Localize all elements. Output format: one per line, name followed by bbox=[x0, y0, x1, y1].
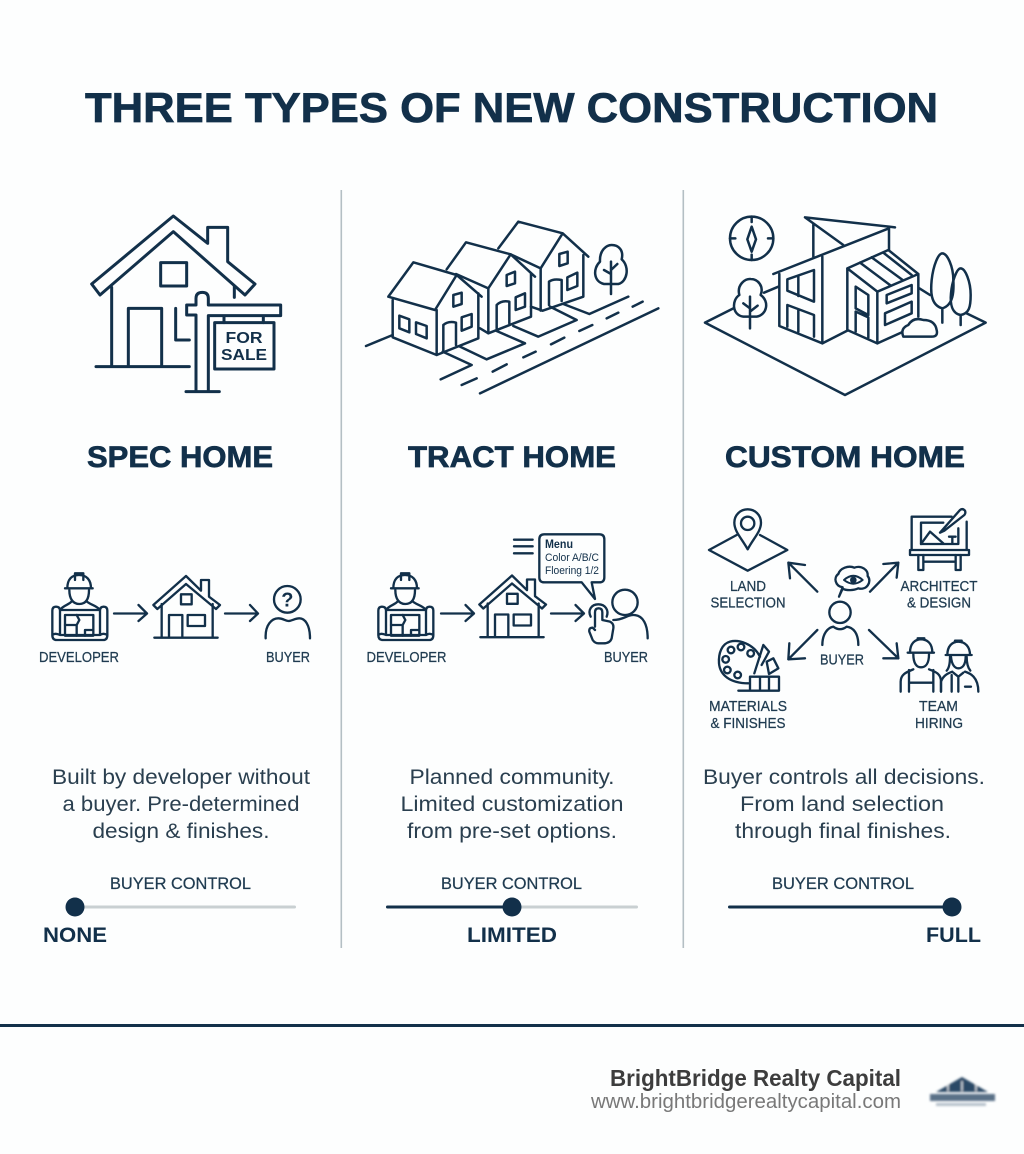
label: buyer: BUYER bbox=[604, 650, 648, 666]
description: through final finishes. bbox=[735, 819, 951, 843]
label: materials and finishes bbox=[709, 699, 787, 732]
icon: developer bbox=[52, 573, 107, 640]
label: team hiring: TEAM bbox=[919, 699, 958, 715]
arrow bbox=[551, 605, 584, 621]
icon: house bbox=[479, 575, 546, 637]
flow diagram: developer to buyer bbox=[39, 573, 310, 666]
label: land selection: LAND bbox=[730, 579, 766, 595]
panel: custom home bbox=[703, 217, 986, 947]
label: materials and finishes: MATERIALS bbox=[709, 699, 787, 715]
icon: row of tract houses bbox=[366, 222, 658, 393]
icon: house with for sale sign bbox=[92, 216, 281, 392]
footer bbox=[590, 1065, 995, 1113]
radial diagram: buyer decisions bbox=[709, 509, 978, 732]
sign text bbox=[221, 330, 267, 364]
label: materials and finishes: & FINISHES bbox=[710, 716, 786, 732]
website: www.brightbridgerealtycapital.com bbox=[590, 1091, 901, 1113]
icon: buyer bbox=[822, 602, 858, 645]
label: team hiring bbox=[915, 699, 963, 732]
description: From land selection bbox=[740, 792, 944, 816]
logo bbox=[930, 1077, 995, 1106]
panel: spec home bbox=[39, 216, 310, 947]
icon: architect drafting table bbox=[910, 509, 969, 570]
flow diagram: developer to buyer with menu bbox=[366, 534, 648, 666]
arrows from buyer bbox=[788, 563, 898, 659]
sign text: FOR bbox=[226, 330, 262, 347]
buyer control slider: none: NONE bbox=[43, 924, 107, 947]
brand name: BrightBridge Realty Capital bbox=[610, 1065, 901, 1091]
label: architect and design: & DESIGN bbox=[907, 596, 971, 612]
footer rule bbox=[0, 1024, 1024, 1027]
title: THREE TYPES OF NEW CONSTRUCTION bbox=[85, 84, 938, 131]
label: architect and design bbox=[900, 579, 978, 612]
description: from pre-set options. bbox=[407, 819, 617, 843]
icon: custom home on lot bbox=[705, 217, 986, 395]
buyer control slider: limited bbox=[386, 875, 638, 947]
description bbox=[400, 765, 624, 843]
description: Limited customization bbox=[400, 792, 624, 816]
icon: construction team bbox=[901, 638, 978, 692]
icon: paint palette and swatches bbox=[719, 641, 779, 691]
description bbox=[52, 765, 310, 843]
menu text: Color A/B/C bbox=[545, 552, 599, 564]
sign text: SALE bbox=[221, 347, 267, 364]
label: developer: DEVELOPER bbox=[39, 650, 119, 666]
icon: buyer with question mark bbox=[266, 586, 310, 638]
menu text: Menu bbox=[545, 539, 573, 551]
heading: custom home: CUSTOM HOME bbox=[725, 441, 965, 474]
menu text bbox=[545, 539, 599, 577]
buyer control slider: none bbox=[43, 875, 296, 947]
description: a buyer. Pre-determined bbox=[62, 792, 300, 816]
icon: menu lines and speech bubble bbox=[514, 534, 604, 599]
arrow bbox=[225, 605, 258, 621]
menu text: Floering 1/2 bbox=[545, 565, 599, 577]
icon: land selection pin bbox=[709, 509, 787, 571]
description bbox=[703, 765, 985, 843]
description: Built by developer without bbox=[52, 765, 310, 789]
panel: tract home bbox=[366, 222, 658, 947]
label: buyer: BUYER bbox=[820, 652, 864, 668]
heading: spec home: SPEC HOME bbox=[87, 441, 273, 474]
label: land selection bbox=[710, 579, 786, 612]
description: Buyer controls all decisions. bbox=[703, 765, 985, 789]
icon: buyer with question mark: ? bbox=[281, 590, 293, 612]
icon: thought bubble with eye bbox=[835, 567, 869, 597]
buyer control slider: limited: LIMITED bbox=[467, 924, 557, 947]
icon: developer bbox=[378, 573, 433, 640]
heading: tract home: TRACT HOME bbox=[408, 441, 616, 474]
buyer control slider: full bbox=[728, 875, 981, 947]
description: Planned community. bbox=[410, 765, 614, 789]
arrow bbox=[441, 605, 474, 621]
buyer control slider: full: FULL bbox=[926, 924, 981, 947]
label: team hiring: HIRING bbox=[915, 716, 963, 732]
buyer control slider: none: BUYER CONTROL bbox=[110, 875, 251, 893]
label: architect and design: ARCHITECT bbox=[900, 579, 978, 595]
label: developer: DEVELOPER bbox=[366, 650, 446, 666]
buyer control slider: limited: BUYER CONTROL bbox=[441, 875, 582, 893]
icon: buyer tapping menu bbox=[589, 590, 648, 643]
icon: house bbox=[153, 576, 220, 638]
arrow bbox=[114, 605, 147, 621]
buyer control slider: full: BUYER CONTROL bbox=[772, 875, 914, 893]
label: land selection: SELECTION bbox=[710, 596, 786, 612]
description: design & finishes. bbox=[92, 819, 270, 843]
label: buyer: BUYER bbox=[266, 650, 310, 666]
